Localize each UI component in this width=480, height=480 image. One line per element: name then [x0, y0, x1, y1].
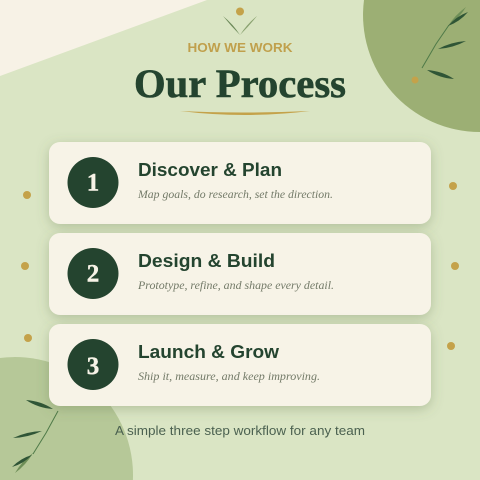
- footer caption: A simple three step workflow for any team: [115, 424, 365, 438]
- top emblem: dot and leaves: [223, 8, 257, 35]
- bottom left green circle: [0, 357, 133, 480]
- cream corner shape: [0, 0, 207, 76]
- leaf sprig: bottom left: [12, 400, 58, 473]
- number badge 3: [68, 339, 118, 390]
- title: Our Process: [134, 61, 346, 106]
- card 1: [49, 142, 431, 224]
- number badge 2: [68, 248, 118, 299]
- heading 2: Design & Build: [138, 251, 275, 271]
- number badge 3: 3: [87, 353, 99, 380]
- number badge 1: 1: [87, 170, 99, 196]
- description 3: Ship it, measure, and keep improving.: [138, 369, 320, 383]
- heading 3: Launch & Grow: [138, 342, 280, 362]
- top right green circle: [363, 0, 480, 132]
- leaf sprig: top right: [422, 7, 468, 79]
- description 2: Prototype, refine, and shape every detail.: [137, 278, 334, 292]
- eyebrow: HOW WE WORK: [188, 41, 292, 55]
- number badge 2: 2: [87, 260, 99, 288]
- number badge 1: [68, 157, 118, 208]
- title underline: [180, 111, 310, 115]
- card 2: [49, 233, 431, 315]
- gold dots: [21, 76, 459, 350]
- description 1: Map goals, do research, set the direction.: [137, 187, 333, 201]
- heading 1: Discover & Plan: [138, 160, 282, 180]
- card 3: [49, 324, 431, 406]
